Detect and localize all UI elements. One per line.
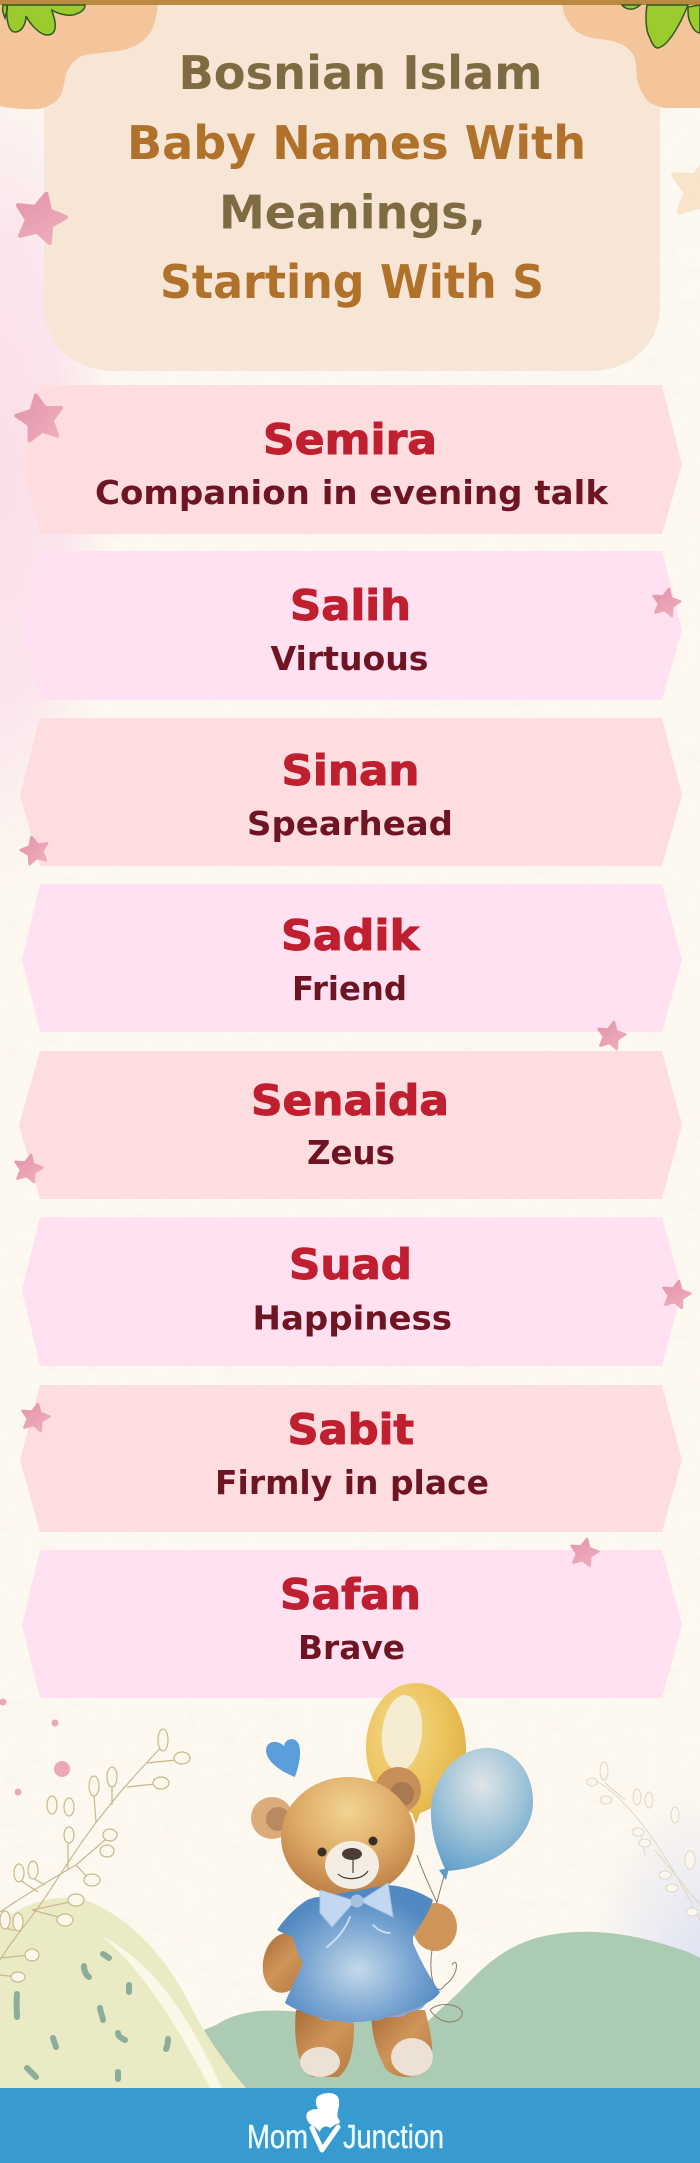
illustration: balloons xyxy=(366,1683,533,2022)
bear bow tie xyxy=(320,1883,393,1927)
decorative stars xyxy=(11,153,700,1567)
panel: Sadik: Sadik xyxy=(281,911,420,960)
yellow balloon xyxy=(366,1683,466,1824)
bear arms xyxy=(258,1903,457,1996)
footer band xyxy=(0,2088,700,2163)
panel: Sinan: Spearhead xyxy=(247,804,453,843)
panel: Safan: Brave xyxy=(298,1628,405,1667)
bear ears xyxy=(251,1767,421,1839)
bear head xyxy=(281,1777,415,1897)
balloon strings xyxy=(417,1855,462,2022)
icon: green leaves right xyxy=(622,5,700,48)
panel: Semira: Companion in evening talk xyxy=(95,473,609,512)
icon: mother silhouette xyxy=(306,2093,340,2150)
title text xyxy=(127,46,586,309)
illustration: teddy bear xyxy=(251,1767,457,2077)
panel: Salih: Virtuous xyxy=(270,639,428,678)
panel: Sinan: Sinan xyxy=(282,746,420,795)
blue balloon xyxy=(431,1748,533,1880)
panel: Sadik xyxy=(22,884,682,1032)
icon: blue heart xyxy=(266,1739,300,1777)
bear dress xyxy=(277,1885,440,2023)
panel: Semira: Semira xyxy=(263,415,437,464)
panel: Suad xyxy=(22,1217,682,1366)
panel: Senaida xyxy=(19,1051,682,1199)
corner blob: left xyxy=(0,5,158,109)
panel: Semira xyxy=(22,385,682,534)
panel: Sinan xyxy=(20,718,682,866)
logo: MomJunction: Mom xyxy=(247,2118,308,2155)
icon: green leaves left xyxy=(3,5,85,35)
scene: dots xyxy=(0,1698,70,1796)
corner blob: right xyxy=(562,5,700,108)
panel: Sabit xyxy=(20,1385,682,1532)
title text: Bosnian Islam xyxy=(178,46,542,100)
scene: sage green hill xyxy=(192,1932,700,2088)
top accent bar xyxy=(0,0,700,5)
panel: Salih: Salih xyxy=(290,581,411,630)
logo: MomJunction xyxy=(247,2093,444,2155)
title text: Starting With S xyxy=(160,255,544,309)
title text: Baby Names With xyxy=(127,116,586,170)
panel: Sabit: Firmly in place xyxy=(215,1463,489,1502)
title text: Meanings, xyxy=(219,186,486,240)
scene: right branch xyxy=(587,1762,700,1920)
panel: Salih xyxy=(22,551,682,700)
panel: Senaida: Senaida xyxy=(251,1076,449,1125)
bear face xyxy=(318,1836,379,1889)
scene: left branch xyxy=(0,1729,190,1982)
panel: Suad: Suad xyxy=(289,1240,412,1289)
panel: Senaida: Zeus xyxy=(307,1133,395,1172)
panel: Suad: Happiness xyxy=(252,1298,452,1338)
panel: Sabit: Sabit xyxy=(288,1405,414,1454)
logo: MomJunction: Junction xyxy=(343,2118,444,2155)
panel: Safan: Safan xyxy=(280,1570,421,1619)
panel: Safan xyxy=(22,1550,682,1698)
bear legs and feet xyxy=(295,2010,433,2077)
title panel xyxy=(44,5,660,371)
panel: Sadik: Friend xyxy=(292,969,407,1008)
scene: pale green hill with dashes xyxy=(0,1897,246,2088)
